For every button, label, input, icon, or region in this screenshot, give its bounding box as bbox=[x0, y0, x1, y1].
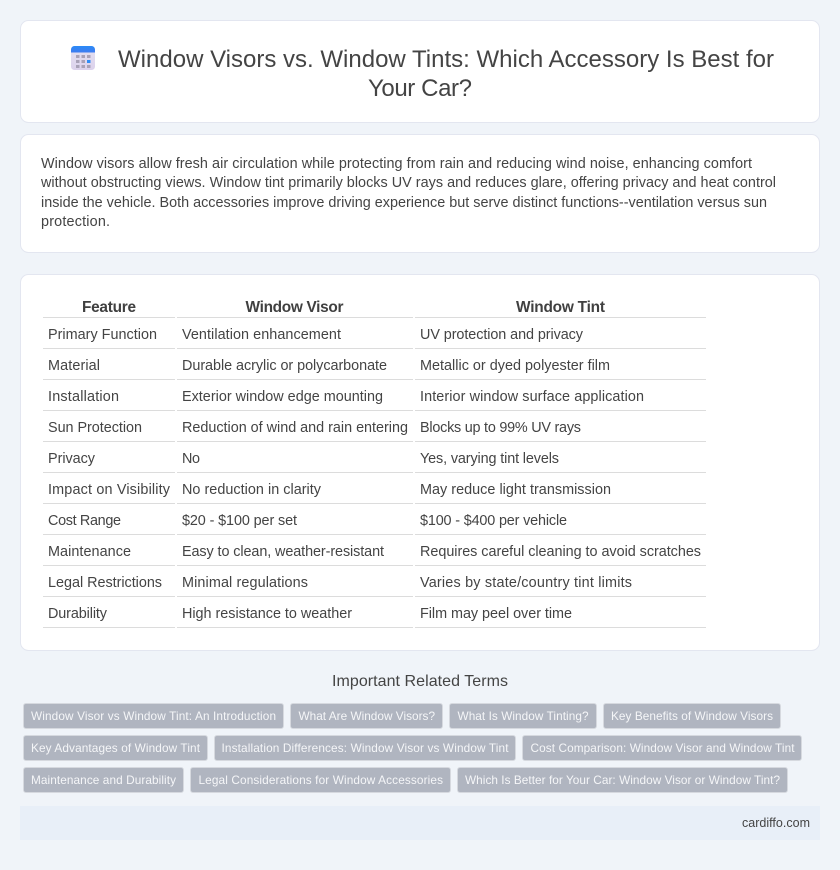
heading: Window Visors vs. Window Tints: Which Accessory Is Best for bbox=[118, 46, 774, 73]
text block: summary: Window visors allow fresh air circulation while protecting from rain and reducing wind noise, enhancing comfort bbox=[41, 156, 752, 172]
tag: What Are Window Visors? bbox=[298, 709, 435, 723]
heading: related terms: Important Related Terms bbox=[332, 673, 508, 690]
row: sun protection: Blocks up to 99% UV rays bbox=[420, 420, 581, 436]
text block: summary: protection. bbox=[41, 214, 110, 230]
row: privacy bbox=[48, 451, 559, 467]
tag: Cost Comparison: Window Visor and Window Tint bbox=[530, 741, 795, 755]
heading: Your Car? bbox=[368, 75, 472, 102]
row: privacy: Yes, varying tint levels bbox=[420, 451, 559, 467]
row: durability: High resistance to weather bbox=[182, 606, 352, 622]
row: maintenance: Easy to clean, weather-resistant bbox=[182, 544, 384, 560]
row: impact on visibility: No reduction in clarity bbox=[182, 482, 322, 498]
row: material bbox=[48, 358, 610, 374]
row: cost range: Cost Range bbox=[48, 513, 121, 529]
table header: Window Visor bbox=[246, 299, 344, 316]
row: impact on visibility: May reduce light transmission bbox=[420, 482, 611, 498]
row: material: Material bbox=[48, 358, 100, 374]
table header: Feature bbox=[82, 299, 136, 316]
text block: summary: without obstructing views. Window tint primarily blocks UV rays and reduces glare, offering privacy and heat control bbox=[40, 175, 776, 191]
footer credit: cardiffo.com bbox=[742, 816, 810, 830]
table header bbox=[82, 299, 605, 316]
tag bbox=[24, 768, 184, 792]
row: primary function: Primary Function bbox=[48, 327, 157, 343]
text block: summary: inside the vehicle. Both accessories improve driving experience but serve distinct functions--ventilation versus sun bbox=[41, 195, 767, 211]
row: privacy: Privacy bbox=[48, 451, 96, 467]
icon: calendar bbox=[71, 46, 95, 70]
row: material: Metallic or dyed polyester film bbox=[420, 358, 610, 374]
row: primary function: Ventilation enhancement bbox=[182, 327, 341, 343]
row: sun protection: Sun Protection bbox=[48, 420, 142, 436]
row: impact on visibility: Impact on Visibility bbox=[48, 482, 171, 498]
row: durability: Durability bbox=[48, 606, 108, 622]
panel: comparison table bbox=[20, 274, 820, 650]
row: cost range: $20 - $100 per set bbox=[182, 513, 297, 529]
tag bbox=[458, 768, 788, 792]
tag: Key Benefits of Window Visors bbox=[611, 709, 773, 723]
tag bbox=[24, 736, 208, 760]
row: cost range bbox=[48, 513, 567, 529]
row: cost range: $100 - $400 per vehicle bbox=[420, 513, 567, 529]
tag bbox=[24, 704, 284, 728]
row: durability bbox=[48, 606, 572, 622]
tag bbox=[290, 704, 442, 728]
tag: Legal Considerations for Window Accessories bbox=[198, 773, 443, 787]
row: installation: Installation bbox=[48, 389, 119, 405]
tag: What Is Window Tinting? bbox=[458, 709, 589, 723]
tag bbox=[522, 736, 802, 760]
tag bbox=[190, 768, 450, 792]
row: installation bbox=[48, 389, 644, 405]
panel: intro text bbox=[20, 134, 820, 252]
heading bbox=[118, 46, 774, 102]
row: durability: Film may peel over time bbox=[420, 606, 572, 622]
row: sun protection: Reduction of wind and rain entering bbox=[182, 420, 408, 436]
tag: Key Advantages of Window Tint bbox=[31, 741, 201, 755]
row: primary function: UV protection and privacy bbox=[420, 327, 584, 343]
row: legal restrictions: Minimal regulations bbox=[182, 575, 308, 591]
row: maintenance bbox=[48, 544, 701, 560]
tag bbox=[214, 736, 516, 760]
row: legal restrictions bbox=[48, 575, 632, 591]
row: maintenance: Maintenance bbox=[48, 544, 131, 560]
row: material: Durable acrylic or polycarbonate bbox=[182, 358, 387, 374]
tag bbox=[604, 704, 780, 728]
tag: Which Is Better for Your Car: Window Visor or Window Tint? bbox=[465, 773, 780, 787]
row: privacy: No bbox=[182, 451, 200, 467]
row: installation: Exterior window edge mounting bbox=[182, 389, 383, 405]
panel: related term tags bbox=[24, 704, 802, 792]
row: impact on visibility bbox=[48, 482, 611, 498]
tag bbox=[450, 704, 596, 728]
row: maintenance: Requires careful cleaning to avoid scratches bbox=[420, 544, 701, 560]
row: legal restrictions: Legal Restrictions bbox=[48, 575, 162, 591]
row: primary function bbox=[48, 327, 584, 343]
panel: title header bbox=[20, 20, 820, 122]
tag: Installation Differences: Window Visor vs Window Tint bbox=[222, 741, 509, 755]
row: installation: Interior window surface application bbox=[420, 389, 644, 405]
text block: summary bbox=[40, 156, 776, 230]
footer bar bbox=[20, 806, 820, 840]
table header: Window Tint bbox=[516, 299, 605, 316]
tag: Maintenance and Durability bbox=[31, 773, 176, 787]
row: legal restrictions: Varies by state/country tint limits bbox=[420, 575, 632, 591]
row: sun protection bbox=[48, 420, 581, 436]
tag: Window Visor vs Window Tint: An Introduction bbox=[31, 709, 276, 723]
